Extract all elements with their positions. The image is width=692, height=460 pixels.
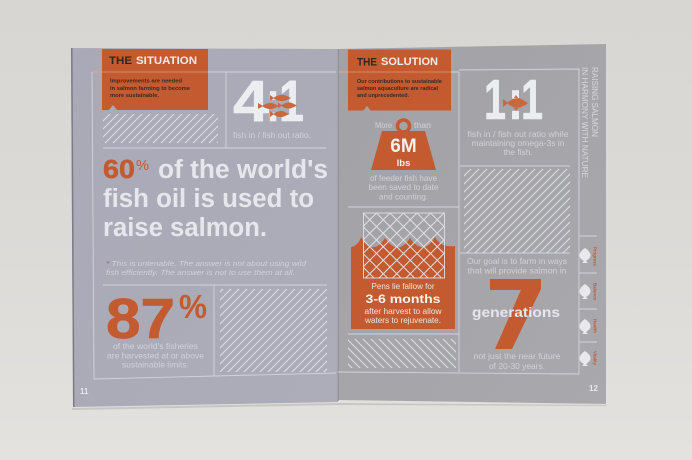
side title: RAISING SALMON xyxy=(590,67,599,137)
page number 11: 11 xyxy=(80,387,89,396)
frame lines xyxy=(92,72,336,379)
seven generations: of 20-30 years. xyxy=(489,362,545,371)
caption: feeder fish: and counting. xyxy=(379,192,428,202)
ratio 4:1 xyxy=(233,69,304,134)
net xyxy=(363,212,445,278)
fish icons column: Health xyxy=(592,319,598,333)
ratio 1:1 xyxy=(484,68,543,132)
ratio caption: maintaining omega-3s in xyxy=(472,139,565,148)
header: the situation xyxy=(92,49,208,110)
icon: weight 6M lbs: lbs xyxy=(397,158,410,169)
ratio 4:1: 4 xyxy=(233,69,269,134)
side title xyxy=(580,67,599,178)
hatch panel xyxy=(464,169,570,253)
fish icons column xyxy=(579,247,598,366)
icon: weight 6M lbs: 6M xyxy=(390,136,417,157)
seven generations: Our goal is to farm in ways xyxy=(467,257,567,266)
icon: weight 6M lbs: than xyxy=(414,121,431,130)
ratio caption: fish in / fish out ratio while xyxy=(468,130,569,139)
header: the solution: THE xyxy=(357,56,377,68)
seven generations: generations xyxy=(472,304,560,320)
icon: progress fish xyxy=(579,248,591,263)
fallow panel: 3-6 months xyxy=(366,292,441,306)
note: fish efficiently. The answer is not to use them at all. xyxy=(106,268,295,277)
icon: fish school xyxy=(258,95,297,117)
icon: weight 6M lbs: More xyxy=(375,121,393,130)
caption: feeder fish: been saved to date xyxy=(368,183,439,192)
seven generations: not just the near future xyxy=(474,352,561,361)
fallow panel: waters to rejuvenate. xyxy=(364,316,441,325)
headline statistic: % xyxy=(136,157,149,174)
header: the solution: salmon aquaculture are radical xyxy=(357,86,438,92)
headline statistic: 60 xyxy=(103,156,135,184)
statistic 87 percent: sustainable limits. xyxy=(122,360,189,370)
icon: vitality fish xyxy=(579,351,591,366)
page number 12: 12 xyxy=(589,384,598,393)
fish icons column: Vitality xyxy=(592,351,598,365)
frame lines xyxy=(338,69,597,374)
ratio caption xyxy=(468,130,569,157)
statistic 87 percent xyxy=(106,287,207,370)
statistic 87 percent: % xyxy=(179,288,207,325)
ratio 1:1: 1 xyxy=(484,68,506,132)
booklet shadow xyxy=(70,49,608,410)
note: * This is untenable. The answer is not about using wild xyxy=(106,259,307,268)
header: the situation: in salmon farming to become xyxy=(110,86,190,92)
ratio caption: fish in / fish out ratio. xyxy=(233,131,311,140)
ratio 4:1: : xyxy=(266,69,280,134)
ratio 1:1: 1 xyxy=(521,68,543,132)
ratio 1:1: : xyxy=(508,68,523,132)
side title: IN HARMONY WITH NATURE xyxy=(580,67,589,178)
icon: single fish xyxy=(503,95,528,111)
header: the situation: SITUATION xyxy=(136,55,197,67)
header: the situation: Improvements are needed xyxy=(110,78,183,84)
seven generations xyxy=(467,257,567,371)
caption: feeder fish: of feeder fish have xyxy=(370,174,437,183)
header: the solution: Our contributions to sustainable xyxy=(357,79,442,85)
header: the situation: more sustainable. xyxy=(110,93,159,99)
fish icons column: Balance xyxy=(592,283,598,300)
headline statistic xyxy=(103,156,328,242)
statistic 87 percent: of the world's fisheries xyxy=(113,342,198,351)
hatch panel xyxy=(103,114,218,143)
seven generations: that will provide salmon in xyxy=(468,266,567,276)
headline statistic: raise salmon. xyxy=(103,214,267,242)
statistic 87 percent: 87 xyxy=(106,287,175,351)
headline statistic: fish oil is used to xyxy=(103,185,314,213)
fallow panel: after harvest to allow xyxy=(364,307,442,316)
header: the solution: SOLUTION xyxy=(381,56,438,68)
icon: health fish xyxy=(579,319,591,334)
header: the situation: THE xyxy=(109,55,132,67)
ratio 4:1: 1 xyxy=(279,69,304,134)
ratio caption: the fish. xyxy=(504,148,532,157)
statistic 87 percent: are harvested at or above xyxy=(107,352,204,360)
note xyxy=(106,259,307,277)
caption: feeder fish xyxy=(368,174,439,202)
header: the solution: and unprecedented. xyxy=(357,93,409,99)
fish icons column: Progress xyxy=(592,247,598,266)
panel: right page xyxy=(338,44,606,404)
water xyxy=(351,237,455,329)
hatch panel xyxy=(348,339,456,368)
header: the solution xyxy=(338,50,451,111)
fallow panel xyxy=(351,212,455,329)
panel: left page xyxy=(71,48,338,407)
fallow panel: Pens lie fallow for xyxy=(372,282,435,291)
icon: balance fish xyxy=(579,284,591,299)
hatch panel xyxy=(220,289,327,372)
headline statistic: of the world's xyxy=(158,156,328,184)
icon: weight 6M lbs xyxy=(371,120,436,170)
